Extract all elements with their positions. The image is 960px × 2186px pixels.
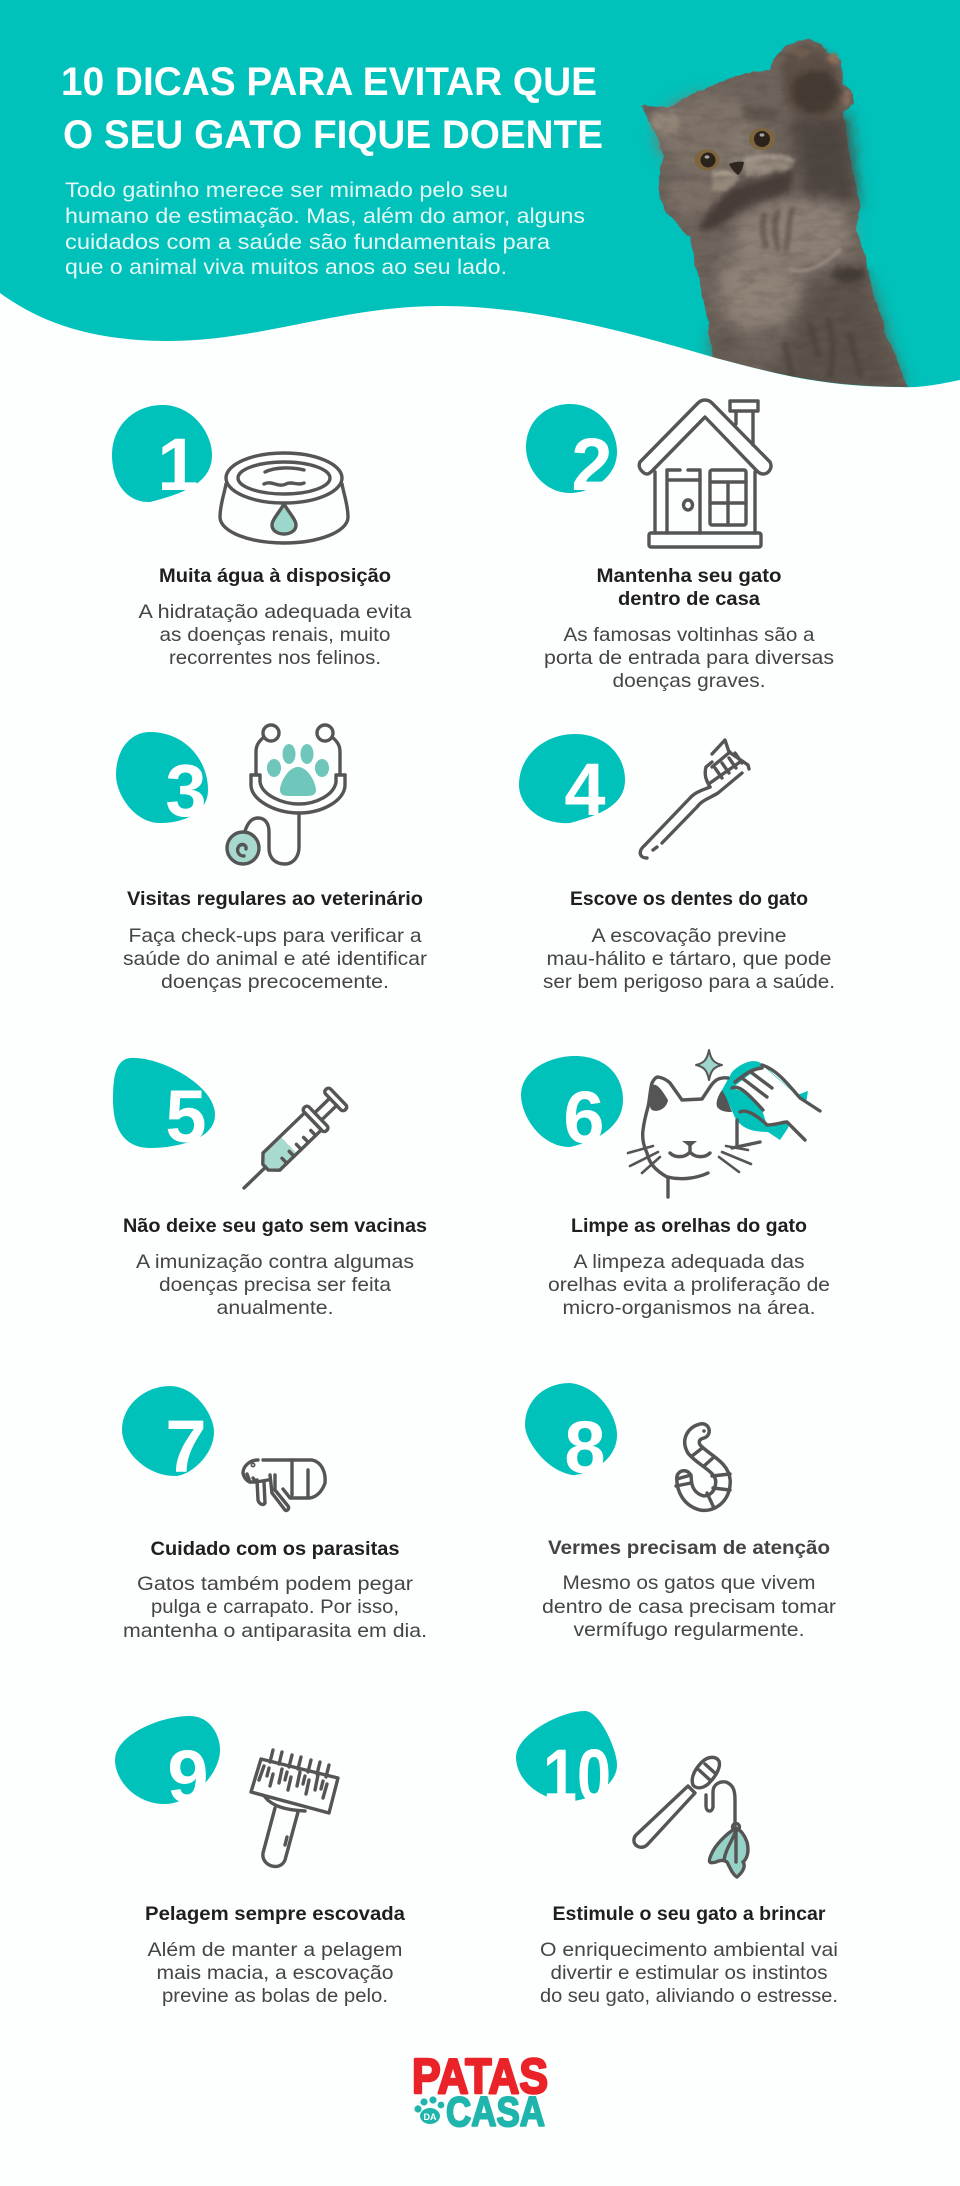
logo: Patas da Casa xyxy=(412,2050,548,2135)
cloth xyxy=(722,1061,808,1140)
description 8: vermífugo regularmente. xyxy=(574,1619,804,1641)
icon: flea xyxy=(243,1460,325,1511)
description 1: A hidratação adequada evita xyxy=(138,601,412,623)
tip 4 xyxy=(519,734,835,993)
number 1: 1 xyxy=(157,423,199,506)
number 10: 10 xyxy=(543,1734,611,1817)
heading 5: Não deixe seu gato sem vacinas xyxy=(123,1216,427,1237)
dark ears xyxy=(649,1085,732,1112)
number blob 1 xyxy=(112,405,212,502)
number blob 6 xyxy=(521,1056,623,1147)
description 3: saúde do animal e até identificar xyxy=(123,948,428,970)
icon: toothbrush xyxy=(640,740,749,858)
tip 1 xyxy=(112,405,412,669)
description 4 xyxy=(543,925,835,993)
heading 2: dentro de casa xyxy=(618,589,760,610)
cat head xyxy=(628,1077,760,1197)
description 4: A escovação previne xyxy=(592,925,786,947)
folded paw and chest xyxy=(735,200,853,268)
number blob 5 xyxy=(113,1058,215,1148)
heading 2 xyxy=(596,566,782,610)
title: O SEU GATO FIQUE DOENTE xyxy=(63,113,603,157)
tip 2 xyxy=(526,400,834,692)
paw print xyxy=(267,744,329,796)
number 3: 3 xyxy=(165,749,207,832)
heading 3: Visitas regulares ao veterinário xyxy=(127,889,423,910)
tip 9 xyxy=(115,1716,405,2007)
icon: syringe xyxy=(233,1085,349,1200)
description 3 xyxy=(123,925,428,993)
tip 3 xyxy=(116,725,428,993)
description 2: As famosas voltinhas são a xyxy=(564,624,815,646)
icon: feather wand xyxy=(634,1757,748,1877)
tip 6 xyxy=(521,1050,830,1319)
cat nose xyxy=(682,1141,697,1147)
description 1: recorrentes nos felinos. xyxy=(169,647,381,669)
number 8: 8 xyxy=(564,1406,606,1489)
hand outline xyxy=(732,1065,820,1140)
number 4: 4 xyxy=(564,748,606,831)
description 10: O enriquecimento ambiental vai xyxy=(540,1939,838,1961)
description 8: dentro de casa precisam tomar xyxy=(542,1596,837,1618)
description 6: A limpeza adequada das xyxy=(574,1251,805,1273)
tip 8 xyxy=(525,1383,837,1641)
description 1 xyxy=(138,601,412,669)
description 2: porta de entrada para diversas xyxy=(544,647,834,669)
intro text: cuidados com a saúde são fundamentais para xyxy=(65,231,550,254)
heading 4: Escove os dentes do gato xyxy=(570,889,808,910)
icon: house xyxy=(639,400,771,547)
intro text: que o animal viva muitos anos ao seu lado. xyxy=(65,256,507,279)
head fur tone xyxy=(657,95,767,175)
intro text: Todo gatinho merece ser mimado pelo seu xyxy=(65,179,508,202)
tip 10 xyxy=(516,1711,838,2007)
description 8 xyxy=(542,1572,837,1641)
cat photo illustration xyxy=(641,40,910,392)
number blob 3 xyxy=(116,732,208,823)
fur streaks xyxy=(715,156,860,385)
number blob 4 xyxy=(519,734,625,823)
description 9: previne as bolas de pelo. xyxy=(162,1985,388,2007)
number 5: 5 xyxy=(165,1075,207,1158)
description 1: as doenças renais, muito xyxy=(160,624,391,646)
description 7: Gatos também podem pegar xyxy=(137,1573,414,1595)
icon: stethoscope xyxy=(227,725,345,864)
number blob 9 xyxy=(115,1716,220,1804)
logo paw: DA xyxy=(424,2112,437,2122)
muzzle xyxy=(745,156,795,178)
intro text xyxy=(65,179,585,279)
description 6 xyxy=(548,1251,830,1319)
dark under muzzle xyxy=(700,166,795,230)
intro text: humano de estimação. Mas, além do amor, alguns xyxy=(65,205,585,228)
heading 9: Pelagem sempre escovada xyxy=(145,1904,405,1925)
description 7: mantenha o antiparasita em dia. xyxy=(123,1620,427,1642)
description 2 xyxy=(544,624,834,692)
number blob 8 xyxy=(525,1383,617,1475)
description 7: pulga e carrapato. Por isso, xyxy=(151,1596,399,1618)
description 9 xyxy=(148,1939,402,2007)
description 5: doenças precisa ser feita xyxy=(159,1274,391,1296)
description 4: ser bem perigoso para a saúde. xyxy=(543,971,835,993)
description 8: Mesmo os gatos que vivem xyxy=(562,1572,816,1594)
heading 1: Muita água à disposição xyxy=(159,566,391,587)
title xyxy=(61,60,603,157)
description 5: anualmente. xyxy=(216,1297,334,1319)
description 10: do seu gato, aliviando o estresse. xyxy=(540,1985,838,2007)
description 2: doenças graves. xyxy=(612,670,766,692)
header teal wave xyxy=(0,0,960,387)
icon: grooming brush xyxy=(251,1750,338,1866)
tip 7 xyxy=(122,1386,427,1642)
raised arm and paw xyxy=(781,46,858,205)
heading 6: Limpe as orelhas do gato xyxy=(571,1216,807,1237)
sparkle xyxy=(696,1050,722,1080)
heading 7: Cuidado com os parasitas xyxy=(150,1539,400,1560)
hand xyxy=(732,1065,820,1140)
cat eyes xyxy=(694,128,775,170)
heading 10: Estimule o seu gato a brincar xyxy=(552,1904,826,1925)
number 2: 2 xyxy=(571,423,613,506)
number blob 7 xyxy=(122,1386,214,1476)
icon: cat ear cleaning xyxy=(628,1050,820,1197)
icon: water bowl xyxy=(220,453,348,543)
description 6: micro-organismos na área. xyxy=(562,1297,816,1319)
description 10: divertir e estimular os instintos xyxy=(550,1962,828,1984)
description 7 xyxy=(123,1573,427,1642)
number 6: 6 xyxy=(563,1076,605,1159)
description 3: Faça check-ups para verificar a xyxy=(128,925,422,947)
description 9: mais macia, a escovação xyxy=(156,1962,394,1984)
description 5 xyxy=(136,1251,414,1319)
number blob 2 xyxy=(526,404,617,493)
description 9: Além de manter a pelagem xyxy=(148,1939,402,1961)
number 7: 7 xyxy=(165,1405,207,1488)
description 4: mau-hálito e tártaro, que pode xyxy=(546,948,832,970)
tip 5 xyxy=(113,1058,427,1319)
logo: Patas da Casa: PATAS xyxy=(412,2050,548,2104)
number 9: 9 xyxy=(167,1735,209,1818)
description 5: A imunização contra algumas xyxy=(136,1251,414,1273)
heading 2: Mantenha seu gato xyxy=(596,566,782,587)
description 6: orelhas evita a proliferação de xyxy=(548,1274,830,1296)
logo: Patas da Casa: CASA xyxy=(446,2088,545,2135)
icon: worm xyxy=(676,1429,730,1508)
number blob 10 xyxy=(516,1711,617,1801)
title: 10 DICAS PARA EVITAR QUE xyxy=(61,60,597,104)
description 3: doenças precocemente. xyxy=(161,971,389,993)
cat nose xyxy=(729,162,744,175)
description 10 xyxy=(540,1939,838,2007)
heading 8: Vermes precisam de atenção xyxy=(548,1538,830,1559)
